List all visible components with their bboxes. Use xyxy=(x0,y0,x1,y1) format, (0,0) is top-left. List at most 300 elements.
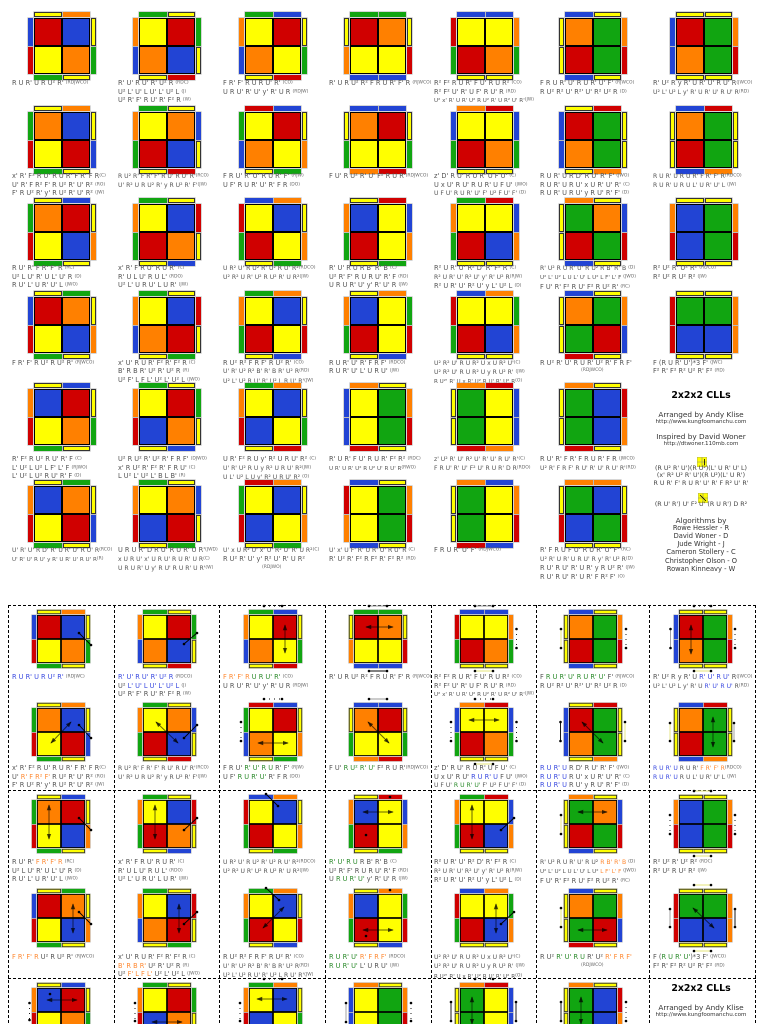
algorithm text: z' D' R U' R U R' U F U' (C) xyxy=(434,172,516,180)
inspired by: Inspired by David Woner xyxy=(656,432,746,440)
algorithm text xyxy=(223,547,319,570)
algorithm text: F R U' R' U' R U R' F' (RJW) xyxy=(223,764,304,772)
cube xyxy=(34,297,90,353)
url: http://dtwoner.110mb.com xyxy=(664,440,738,446)
algorithm text: z' D' R U' R U R' U F U' (C) xyxy=(434,764,516,772)
cube xyxy=(565,112,621,168)
algorithm text: U R U' R' U' y' R' U R (RDJW) xyxy=(223,88,308,96)
cube xyxy=(139,112,195,168)
cube xyxy=(569,894,617,942)
algorithm text xyxy=(434,360,525,385)
cube xyxy=(139,297,195,353)
cube xyxy=(249,894,297,942)
algorithm text xyxy=(434,764,528,791)
algorithm text: R' U² R y R' U R' U' R U' R(JWCO) xyxy=(653,673,752,681)
algorithm text: R' U² R y R' U R' U' R U' R(JWCO) xyxy=(653,79,752,87)
algorithm text: R U² R² U' R²' U' R² U² R (D) xyxy=(540,682,627,690)
cube xyxy=(565,297,621,353)
algorithm text: R' F² R U² R U' R' F (C) xyxy=(12,455,82,463)
cube xyxy=(249,708,297,756)
adjacent swap algorithms: R U R' F' R U R' U' R' F R² U' R' xyxy=(654,480,748,487)
algorithm text: F' R U² R' y' R U² R' U' R² (JW) xyxy=(12,189,104,197)
algorithm text: U² L' U² L y' R' U R' U' R U' R(RD) xyxy=(653,89,749,96)
algorithm text: F (R U R' U')*3 F' (JWC) xyxy=(653,359,722,367)
cube xyxy=(569,800,617,848)
algorithm text: U' R² U R U² R' y R U² R' F'(JW) xyxy=(118,182,207,189)
algorithm text xyxy=(540,673,634,690)
algorithm text xyxy=(118,264,188,289)
algorithm text: U² L' U² L y' R' U R' U' R U' R(RD) xyxy=(653,683,749,690)
algorithm text: U² L' U R U' L U R' (JW) xyxy=(118,281,188,289)
arrows row 2 xyxy=(51,699,734,764)
cube xyxy=(569,988,617,1024)
title: 2x2x2 CLLs xyxy=(671,983,731,994)
algorithm text: U² L' U² L U L' U' L U² L F' L' F (JWO) xyxy=(540,869,636,875)
algorithm text: R' F R U F U' R U R' U' F' (RC) xyxy=(540,546,631,554)
algorithm text: U² R' F' R U' R' F² R (W) xyxy=(118,96,191,104)
algorithm text: R² U R' U' R² D' R' F² R (C) xyxy=(434,264,516,272)
cube xyxy=(350,389,406,445)
algorithm text xyxy=(223,953,313,980)
cube xyxy=(679,615,727,663)
arranged by: Arranged by Andy Klise xyxy=(658,410,744,418)
adjacent swap algorithms xyxy=(640,464,762,488)
algorithm text xyxy=(118,546,218,572)
arrows row 4 xyxy=(73,885,735,951)
algorithm text: L' U² L U² L F' L' F (RJWO) xyxy=(12,464,87,472)
algorithm text: U' R' U' R U' y R' U R' U' R U' R(R) xyxy=(12,557,103,563)
cube xyxy=(679,800,727,848)
cube xyxy=(139,18,195,74)
algorithm text: R U² R² U' R²' U' R² U² R (D) xyxy=(540,88,627,96)
algorithm text: R U²' R' U x R' U² R U' R' U² R(O) xyxy=(434,973,522,980)
algorithm text: R² U² R U² R² (JW) xyxy=(653,273,707,281)
algorithm text xyxy=(118,764,209,783)
cube xyxy=(354,615,402,663)
algorithm text xyxy=(12,764,106,790)
algorithm text: R' U² R U R' U' R U² R B' R' B (D) xyxy=(540,859,635,866)
algorithm text: U R U R' D R U' R U R' U R'(JWD) xyxy=(118,546,218,554)
algorithm text: U' R² U R U² R' y R U² R' F'(JW) xyxy=(118,774,207,781)
cube xyxy=(245,18,301,74)
algorithm text xyxy=(540,455,636,472)
cube xyxy=(37,894,85,942)
cube xyxy=(460,988,508,1024)
algorithm text: B' R B R' U² R' U² R (R) xyxy=(118,367,189,375)
algorithm text: U² x' R' U R' U² R U² R' U R² U' R'(JW) xyxy=(434,692,534,698)
algorithm text: R' U R U² R² F R U R' F' R (RJWCO) xyxy=(329,673,431,681)
algorithm text xyxy=(540,172,630,197)
algorithm text: R² U² R U² R² (JW) xyxy=(653,867,707,875)
algorithm text: (RDJWCO) xyxy=(581,963,604,968)
algorithm text: F U' R U² R' U' F² R U R'(RDJWCO) xyxy=(329,172,428,180)
algorithm text: F R' F' R U R U' R' (CO) xyxy=(223,79,293,87)
cube xyxy=(565,389,621,445)
algorithm text: U R' U R' U² R U² U' R U' R(RWO) xyxy=(329,465,416,472)
algorithm text: U² L' U² R U' R' U² L R U' R'(JW) xyxy=(223,972,313,979)
algorithm text: x' R' F R U' R U R' (C) xyxy=(118,858,184,866)
credits heading: Algorithms by xyxy=(676,516,726,525)
cube xyxy=(245,204,301,260)
cube xyxy=(350,18,406,74)
cube xyxy=(565,18,621,74)
url: http://www.kungfoomanchu.com xyxy=(656,1012,746,1018)
algorithm text: R U R' U R U² R' (RDJWC) xyxy=(12,673,85,681)
cube xyxy=(34,18,90,74)
algorithm text: U² L U' R' U L' U' R (D) xyxy=(12,273,81,281)
algorithm text: R² U R' U' R² U' y' R' U² R(RJW) xyxy=(434,274,522,281)
algorithm text: F U' R' F² R U' F² R U² R' (RC) xyxy=(540,877,630,885)
algorithm text: R U R' U' L' U R U' (JW) xyxy=(329,367,399,375)
algorithm text: x' R' F² R U' R U R' F R' F R(C) xyxy=(12,764,106,772)
algorithm text: R U' L' U R' U' L (JWO) xyxy=(12,875,78,883)
algorithm text: R U' R' F R' F' R (RC) xyxy=(12,264,74,272)
cube xyxy=(34,486,90,542)
arrows row 5 xyxy=(30,979,626,1024)
cube xyxy=(37,800,85,848)
algorithm text: F² R' F² R² U² R' F² (RD) xyxy=(653,962,725,970)
url: http://www.kungfoomanchu.com xyxy=(656,418,746,424)
algorithm credits xyxy=(640,524,762,573)
algorithm text: F R U R' U' F' (RDJWCO) xyxy=(434,546,501,554)
algorithm text: z' U² R' U' R² U' R' U' R U' R'(C) xyxy=(434,456,525,463)
algorithm text: R U' R' F R' F' R (RC) xyxy=(12,858,74,866)
algorithm text: R U R' U R U L' U R' U' L (JW) xyxy=(653,182,736,189)
algorithm text: U² R² U R' U² R U² R' U R²(JW) xyxy=(223,868,309,875)
algorithm text: U' x U R² U' x' U' R² U' R' U R²(C) xyxy=(223,547,319,554)
algorithm text: U' R' U² R U y R² U R U' R²(JW) xyxy=(223,465,311,472)
cube xyxy=(565,486,621,542)
algorithm text: R U² R² F R F' R U² R' (CO) xyxy=(223,359,304,367)
algorithm text xyxy=(434,456,530,472)
algorithm text xyxy=(329,455,421,472)
cube xyxy=(354,800,402,848)
algorithm text: R U R' U R U R' F R' F' R(RDCO) xyxy=(653,173,742,180)
cube xyxy=(350,112,406,168)
algorithm text: U² R U² R' U² R' F R F' (DJWO) xyxy=(118,455,207,463)
algorithm text xyxy=(653,858,713,875)
cube xyxy=(457,486,513,542)
algorithm text: R U R' U R U' x U R' U' R' (C) xyxy=(540,181,630,189)
algorithm text: x U R U' x' U R U' R U R' U R(C) xyxy=(118,556,210,563)
algorithm text: U R U R' U y' R U' R U R' U R'(W) xyxy=(118,565,213,572)
algorithm text xyxy=(653,673,752,691)
algorithm text: U F' R U R' U' R' F R (DO) xyxy=(223,773,300,781)
cube xyxy=(143,708,191,756)
algorithm text: R U R' U R U R' F R' F' R(RDCO) xyxy=(653,765,742,772)
algorithm text: R' U² R U R' U' R U² R B' R' B (D) xyxy=(540,265,635,272)
algorithm text: R' U R' F U' R U R' F² R² (RDC) xyxy=(329,455,421,463)
algorithm text: U R U R' U' y' R' U' R (JW) xyxy=(329,875,408,883)
cube xyxy=(679,708,727,756)
algorithm text: R² U R' U' R² U' y L' U² L (D) xyxy=(434,282,521,290)
algorithm text: U² R² U' R U R² U y R U² R' (JW) xyxy=(434,369,525,376)
algorithm text: F R U' R' U' R U R' F' (RJW) xyxy=(223,172,304,180)
algorithm text: F' R U² R' y' R U² R' U' R² (JW) xyxy=(12,781,104,789)
algorithm text xyxy=(434,264,522,290)
algorithm text: U² R² U' R U R² U x U R² U'(C) xyxy=(434,954,520,961)
algorithm text: F U' R U² R' U' F² R U R'(RDJWCO) xyxy=(329,764,428,772)
algorithm text xyxy=(12,547,112,563)
algorithm text: R² U R' U' R² D' R' F² R (C) xyxy=(434,858,516,866)
algorithm credits: David Woner - D xyxy=(674,532,728,540)
algorithm text: L' U² L U² R U' R' F (D) xyxy=(12,472,81,480)
algorithm text xyxy=(653,264,716,281)
algorithm text: x' R U² R' F² R' F R U' (C) xyxy=(118,464,196,472)
algorithm text: R U R' U R D' R U' R' F' (JWO) xyxy=(540,764,629,772)
cube xyxy=(34,389,90,445)
cube xyxy=(457,112,513,168)
algorithm text: L U² L' U² L' B L B' (R) xyxy=(118,472,186,480)
algorithm text xyxy=(329,858,408,884)
algorithm text: U² x' R' U R' U² R U² R' U R² U' R'(JW) xyxy=(434,98,534,104)
algorithm text: R U R' U' R' F R F' (RDCO) xyxy=(329,953,405,961)
algorithm text xyxy=(434,172,528,197)
algorithm text xyxy=(434,858,522,885)
cube xyxy=(569,708,617,756)
algorithm text xyxy=(329,953,405,970)
cube xyxy=(37,615,85,663)
algorithm text: U² L U' R' U L' U' R (D) xyxy=(12,867,81,875)
panel: annotated CLL chart xyxy=(0,600,768,1024)
algorithm text: (RDJWCO) xyxy=(581,368,604,373)
algorithm text: U² R² U' R U R² U y R U² R' (JW) xyxy=(434,963,525,970)
algorithm text xyxy=(540,546,635,581)
algorithm text: U² L' U' L U' L' U² L (J) xyxy=(118,682,186,690)
algorithm text xyxy=(118,173,209,189)
cube xyxy=(143,800,191,848)
algorithm text: U F' R U R' U' R' F R (DO) xyxy=(223,181,300,189)
algorithm text xyxy=(329,547,416,563)
algorithm text: U² F' L F L' U² L' U² L (JWO) xyxy=(118,376,200,384)
algorithm text: U² L' U² L U L' U' L U² L F' L' F (JWO) xyxy=(540,275,636,281)
cube xyxy=(249,615,297,663)
cube xyxy=(676,18,732,74)
algorithm text: R U² R' F R' F' R U' R U' R'(RCO) xyxy=(118,765,209,772)
algorithm text: R U R' U R U' y R U' R' F' (D) xyxy=(540,781,629,789)
algorithm text xyxy=(12,858,81,884)
algorithm text: U' R' F R² F' R U² R' U' R² (RO) xyxy=(12,181,105,189)
algorithm text xyxy=(653,173,742,189)
algorithm text: U L' U² L U y' R² U R U' R² (O) xyxy=(223,474,309,481)
algorithm text xyxy=(223,764,304,781)
cube xyxy=(245,389,301,445)
algorithm text xyxy=(12,264,82,289)
cube xyxy=(34,112,90,168)
cube xyxy=(679,894,727,942)
algorithm text: R' U L U' R U L' (RDO) xyxy=(118,867,183,875)
algorithm text xyxy=(540,79,634,96)
algorithm text: F R U R' U' R U R' U' F' (RJWCO) xyxy=(540,79,634,87)
algorithm text xyxy=(653,79,752,96)
algorithm text xyxy=(12,455,87,480)
icon: yellow cube adjacent swap xyxy=(697,457,707,467)
algorithm credits: Cameron Stollery - C xyxy=(666,548,736,556)
cube xyxy=(143,988,191,1024)
algorithm text: F (R U R' U')*3 F' (JWCO) xyxy=(653,953,726,961)
algorithm text xyxy=(653,359,725,375)
algorithm text: U² R' F' R U R U' R' F (RD) xyxy=(329,273,408,281)
algorithm text xyxy=(118,79,191,104)
cube xyxy=(34,204,90,260)
cube xyxy=(460,708,508,756)
algorithm text: R' U L U' R U L' (RDO) xyxy=(118,273,183,281)
algorithm text: F R' F' R U R U' R' (CO) xyxy=(223,673,293,681)
algorithm text: B' R B R' U² R' U² R (R) xyxy=(118,962,189,970)
algorithm text: F R' F' R U² R U² R' (RJWCO) xyxy=(12,953,94,961)
algorithm text: R² F² R U R' F U' R U R² (CO) xyxy=(434,79,522,87)
algorithm text xyxy=(329,359,405,375)
algorithm text: R U R' U' R' F R F' (RDCO) xyxy=(329,359,405,367)
algorithm text xyxy=(540,953,632,970)
algorithm text: F R U' R' U' F² U' R U R' D R(RDO) xyxy=(434,465,530,472)
algorithm text: R U R' U R D' R U' R' F' (JWO) xyxy=(540,172,629,180)
cube xyxy=(457,204,513,260)
algorithm text: R U R' U R U' y R U' R' F' (D) xyxy=(540,189,629,197)
cube xyxy=(460,800,508,848)
icon: yellow cube diagonal swap xyxy=(698,493,708,503)
algorithm text xyxy=(434,673,534,700)
algorithm text: U x U' R U' R U R' U F U' (JWO) xyxy=(434,773,528,781)
algorithm text: R U² R' U' R U R' U² R' F R F' xyxy=(540,359,632,367)
algorithm text xyxy=(223,673,308,690)
algorithm text: R U R' U R U L' U R' U' L (JW) xyxy=(653,774,736,781)
cube xyxy=(457,297,513,353)
algorithm text: U² R' F R F' R U' R' U' R U' R'(RD) xyxy=(540,465,636,472)
arranged by: Arranged by Andy Klise xyxy=(658,1002,744,1012)
algorithm credits: Rowe Hessler - R xyxy=(673,524,729,532)
algorithm text: U² R' F' R U R U' R' F (RD) xyxy=(329,867,408,875)
algorithm text: U R U R' U' y' R' U' R (JW) xyxy=(329,281,408,289)
algorithm text xyxy=(653,764,742,783)
algorithm text: R' U' R U R B' R' B (C) xyxy=(329,858,397,866)
algorithm text: R U R' U' L' U R U' (JW) xyxy=(329,962,399,970)
algorithm text: U² F' L F L' U² L' U² L (JWO) xyxy=(118,970,200,978)
algorithm text: U² L' U R U' L U R' (JW) xyxy=(118,875,188,883)
adjacent swap algorithms: (R U² R' U')(R U²)(L' U R' U' L) xyxy=(655,464,747,472)
algorithm text xyxy=(223,455,316,481)
algorithm text: U² R² U R' U² R U² R' U R²(JW) xyxy=(223,274,309,281)
algorithm text: F R' F' R U² R U² R' (RJWCO) xyxy=(12,359,94,367)
algorithm text xyxy=(329,264,408,289)
title: 2x2x2 CLLs xyxy=(671,390,731,401)
algorithm text: U² L' U' L U' L' U² L (J) xyxy=(118,88,186,96)
cube xyxy=(245,112,301,168)
algorithm text: R U² R' U' y' R² U' R' U R² xyxy=(223,555,305,563)
panel: clean CLL chart xyxy=(12,11,752,581)
cube xyxy=(350,204,406,260)
cube xyxy=(460,894,508,942)
algorithm text xyxy=(223,265,316,281)
algorithm text xyxy=(540,265,636,291)
algorithm text: R' U² R' F² R F² R' F² R² (RD) xyxy=(329,555,416,563)
algorithm text: U' R' F R² F' R U² R' U' R² (RO) xyxy=(12,773,105,781)
cube xyxy=(569,615,617,663)
algorithm text: U R² U' R U² R' U² R U' R²(RDCO) xyxy=(223,265,316,272)
algorithm text xyxy=(118,673,192,699)
algorithm text: R² U² R' U² R² (RDCO) xyxy=(653,264,716,272)
cube xyxy=(249,988,297,1024)
algorithm text: R U² R² F R F' R U² R' (CO) xyxy=(223,953,304,961)
algorithm text: R' U' R U R B' R' B (C) xyxy=(329,264,397,272)
algorithm text: U' R' U² R² B' R' B R' U² R(RD) xyxy=(223,963,309,970)
cube xyxy=(354,708,402,756)
algorithm text: R² F² U' R' U F' R U' R (RD) xyxy=(434,682,516,690)
algorithm text: R' U' R U' R' U² R (RDC) xyxy=(118,79,189,87)
algorithm credits: Jude Wright - J xyxy=(677,540,725,548)
algorithm text: R² U R' U' R² U' y' R' U² R(RJW) xyxy=(434,868,522,875)
cube xyxy=(354,988,402,1024)
algorithm text: R' U' R U' R' U² R (RDCO) xyxy=(118,673,192,681)
algorithm text xyxy=(118,455,207,480)
cube xyxy=(676,204,732,260)
arrows row 3 xyxy=(49,791,735,856)
algorithm text: x' U' R U R' F² R' F² R (C) xyxy=(118,953,196,961)
cube xyxy=(565,204,621,260)
algorithm text xyxy=(540,359,632,373)
algorithm text: U² R' F' R U' R' F² R (W) xyxy=(118,690,191,698)
cube xyxy=(350,486,406,542)
algorithm credits: Rowan Kinneavy - W xyxy=(667,565,735,573)
algorithm credits: Christopher Olson - O xyxy=(665,557,737,565)
algorithm text: x' U' R U R' F² R' F² R (C) xyxy=(118,359,196,367)
algorithm text: U² L' U² R U' R' U² L R U' R'(JW) xyxy=(223,378,313,385)
algorithm text: R² U² R' U² R² (RDC) xyxy=(653,858,713,866)
algorithm text xyxy=(653,953,726,970)
algorithm text xyxy=(118,359,200,384)
algorithm text: U' R' U² R² B' R' B R' U² R(RD) xyxy=(223,368,309,375)
adjacent swap algorithms: (x' R² U² R' U')(R U²)(L' U R') xyxy=(657,472,745,479)
algorithm text: R U' R U' R' U R' F R² F' (O) xyxy=(540,573,625,581)
algorithm text: R U' L' U R' U' L (JWO) xyxy=(12,281,78,289)
algorithm text: U² R' U R' U R U' R y' R' U² R(D) xyxy=(540,556,633,563)
cube xyxy=(37,988,85,1024)
algorithm text xyxy=(540,764,630,790)
algorithm text: R U' R' F R' F R U R' F R (JWCO) xyxy=(540,455,635,463)
algorithm text: U x U' R U' R U R' U F U' (JWO) xyxy=(434,181,528,189)
algorithm text: R² U R' U' R² U' y L' U² L (D) xyxy=(434,876,521,884)
algorithm text xyxy=(118,953,200,979)
algorithm text xyxy=(223,79,308,96)
algorithm text: R U² R' U' R U R' U² R' F R F' xyxy=(540,953,632,961)
algorithm text: (RDJWO) xyxy=(262,565,281,570)
cube xyxy=(676,112,732,168)
cube xyxy=(139,486,195,542)
cube xyxy=(143,894,191,942)
algorithm text xyxy=(223,858,316,877)
cube xyxy=(245,297,301,353)
algorithm text xyxy=(12,172,106,197)
algorithm text: R² F² R U R' F U' R U R² (CO) xyxy=(434,673,522,681)
algorithm text: R U² R' F R' F' R U' R U' R'(RCO) xyxy=(118,173,209,180)
cube xyxy=(37,708,85,756)
algorithm text: U F U' R U R' U' F' U² F U' F' (D) xyxy=(434,190,526,197)
algorithm text xyxy=(434,953,525,981)
algorithm text: U R' F² R U y' R² U R U' R² (C) xyxy=(223,455,316,463)
cube xyxy=(457,18,513,74)
algorithm text: U' R' U' R D' R' U R' U' R U' R(RCO) xyxy=(12,547,112,554)
cube xyxy=(249,800,297,848)
cube xyxy=(245,486,301,542)
algorithm text xyxy=(540,858,636,885)
cube xyxy=(139,389,195,445)
algorithm text: U R U' R' U' y' R' U R (RDJW) xyxy=(223,682,308,690)
algorithm text: F R U R' U' R U R' U' F' (RJWCO) xyxy=(540,673,634,681)
algorithm text: U R² U' R U² R' U² R U' R²(RDCO) xyxy=(223,859,316,866)
algorithm text: F U' R' F² R U' F² R U² R' (RC) xyxy=(540,283,630,291)
algorithm text: x' R' F² R U' R U R' F R' F R(C) xyxy=(12,172,106,180)
algorithm text: U F U' R U R' U' F' U² F U' F' (D) xyxy=(434,782,526,789)
